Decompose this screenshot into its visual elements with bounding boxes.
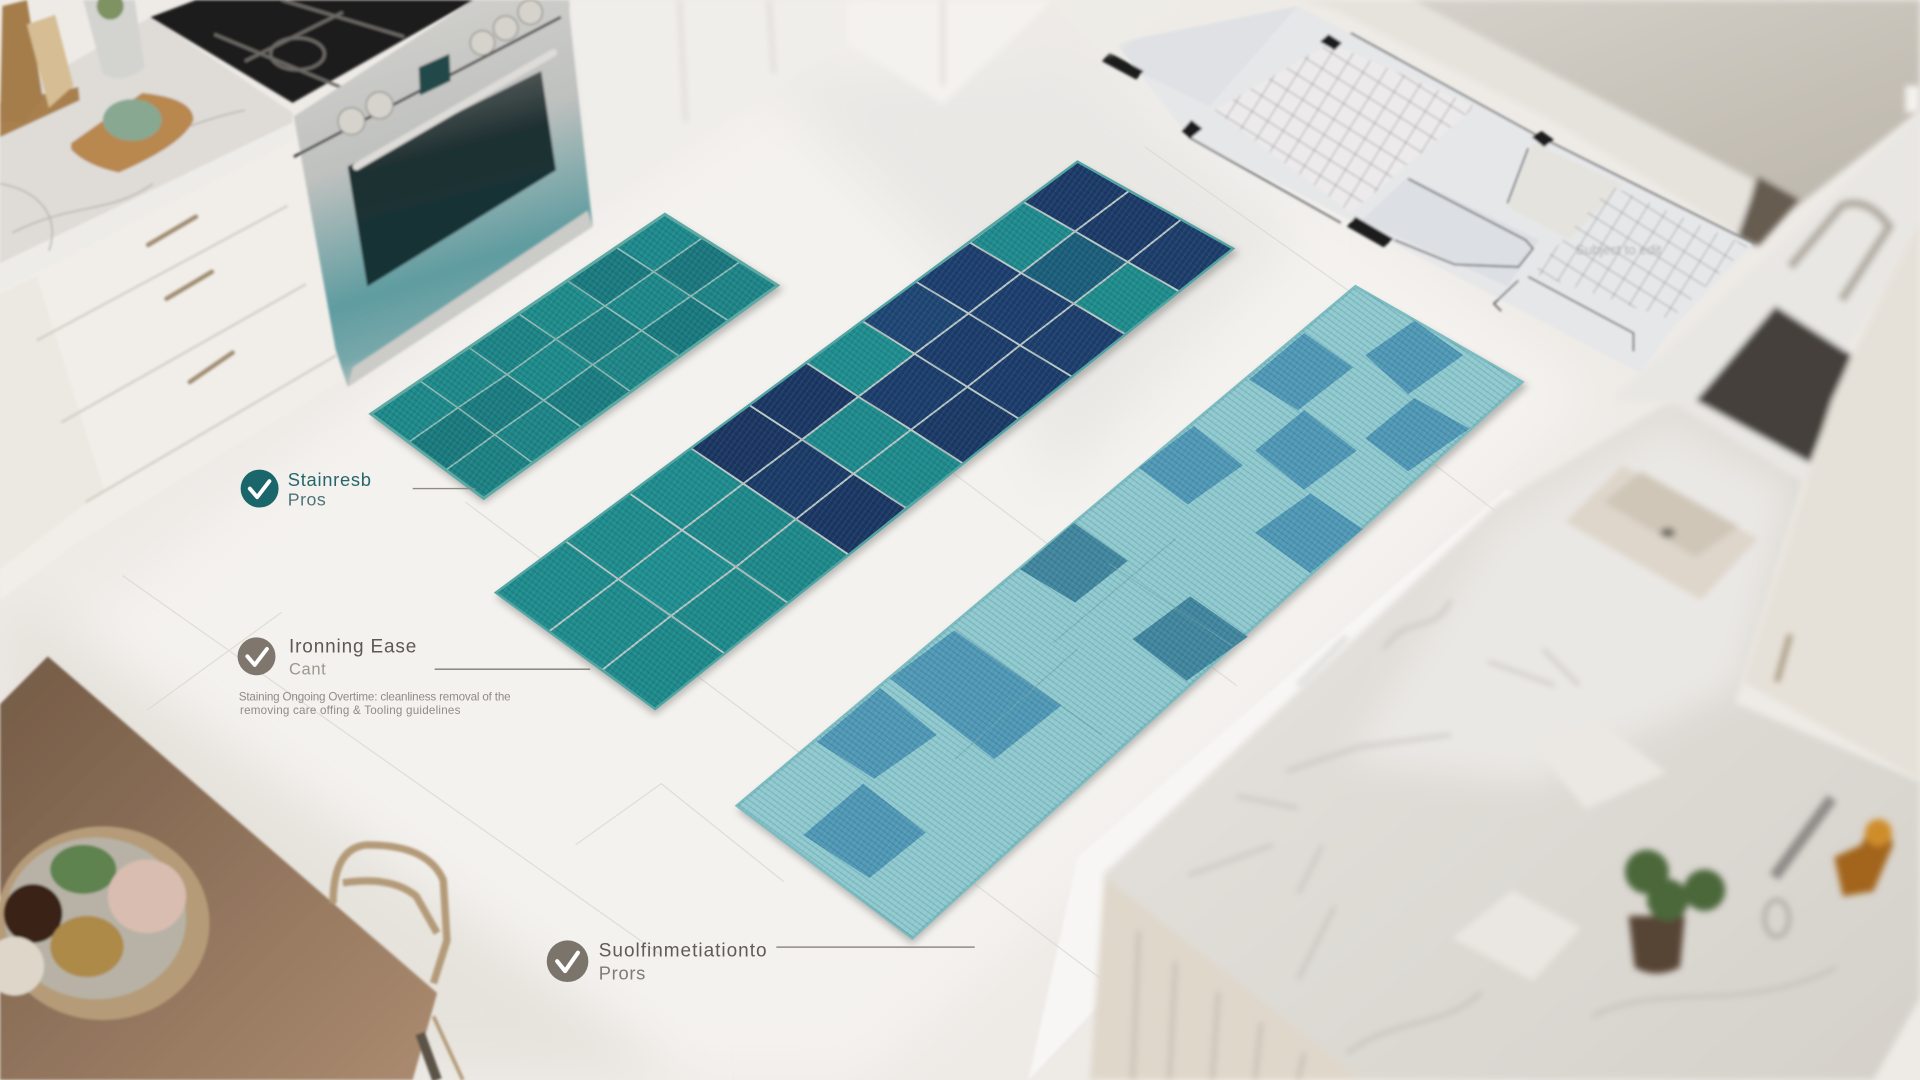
left cabinets: [0, 116, 343, 600]
leader line: [776, 946, 975, 948]
callout subtitle: Cant: [289, 660, 326, 679]
leader line: [413, 488, 475, 490]
island cabinet front: [1090, 877, 1362, 1080]
callout: cleaning ease: [238, 637, 590, 717]
oven knobs: [338, 0, 542, 135]
callout title: Suolfinmetiationto: [599, 940, 767, 961]
rug shadows: [371, 165, 1528, 944]
dining table with plate: [0, 656, 463, 1080]
cabinet handles: [148, 217, 233, 382]
plate: [0, 827, 209, 1020]
long light blue rug: [737, 287, 1522, 938]
callout title: Stainresb: [288, 469, 371, 490]
oven handle: [356, 53, 553, 167]
countertop with tray: [0, 0, 293, 291]
blueprint tape marks: [1102, 53, 1144, 80]
small teal rug: [371, 214, 778, 498]
oven display: [419, 54, 451, 96]
wooden tray: [71, 93, 193, 173]
wall baseboard corner: [1738, 176, 1800, 246]
tall cabinet: [1742, 220, 1920, 781]
faucet: [1790, 203, 1889, 300]
callout: sound maintenance: [547, 940, 975, 984]
icon: teal check: [241, 470, 279, 508]
long navy and teal rug: [496, 162, 1233, 709]
blueprint faint label: Subject to edit: [1576, 243, 1661, 258]
chair: [333, 845, 447, 983]
lower right island: [1090, 398, 1920, 1080]
oven kick plate: [348, 211, 593, 387]
callout subtitle: Pros: [288, 490, 326, 510]
icon: grey check: [547, 940, 588, 982]
amber bottle: [1834, 823, 1893, 896]
callout title: Ironning Ease: [289, 637, 416, 658]
towels, plant and bottle: [1452, 465, 1893, 981]
wall upper right: [1298, 0, 1920, 246]
sink: [1696, 306, 1851, 463]
leader line: [435, 668, 590, 670]
callout: stain resistance: [241, 469, 475, 510]
stove and oven: [151, 0, 593, 387]
callout subtitle: Prors: [599, 963, 645, 984]
top cabinets: [569, 0, 1185, 202]
icon: grey check: [238, 637, 276, 675]
glass vase with plant: [83, 0, 144, 78]
callout description second line: removing care offing & Tooling guidelines: [240, 704, 461, 717]
potted plant: [1629, 916, 1685, 973]
right counter and sink: [1611, 86, 1920, 781]
jar and boards: [0, 87, 80, 137]
blueprint on floor: [1102, 6, 1753, 373]
callout description: Staining Ongoing Overtime: cleanliness removal of the: [239, 690, 511, 703]
